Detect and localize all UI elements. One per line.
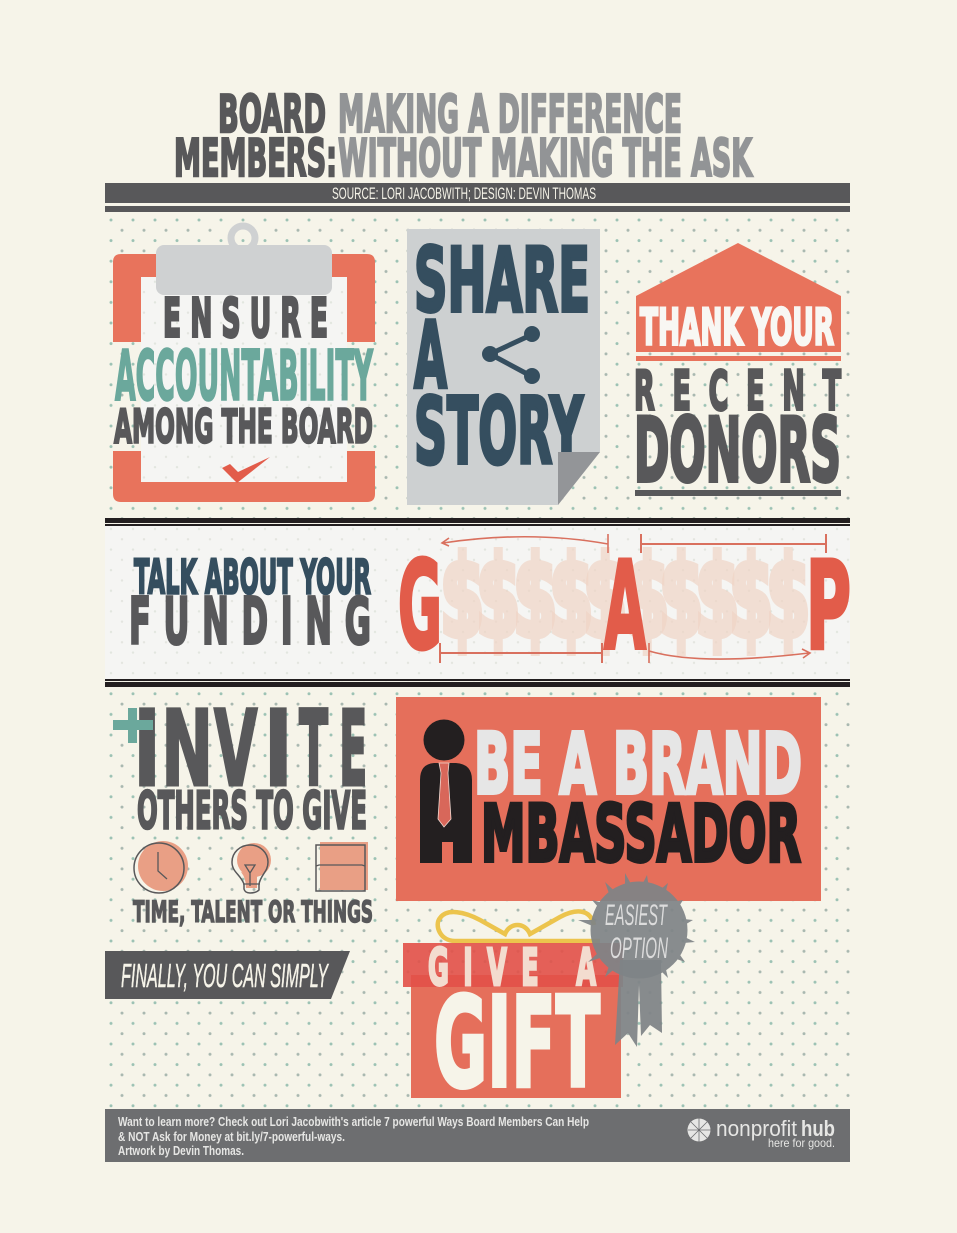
source bar [105, 183, 850, 212]
rosette ribbon [615, 960, 662, 1047]
banner: finally, you can simply: FINALLY, YOU CAN SIMPLY [121, 957, 329, 994]
heading: invite [134, 688, 367, 811]
house shape [636, 243, 841, 361]
text: recent: RECENT [634, 360, 841, 423]
icon: clock [134, 841, 188, 893]
badge text [605, 899, 668, 965]
panel: share a story [407, 229, 600, 505]
dollar signs [440, 533, 810, 663]
icon: plus [113, 708, 153, 743]
clip [156, 226, 332, 295]
logo: nonprofit hub: hub [801, 1116, 835, 1141]
rosette seal [578, 873, 695, 978]
arrows and brackets [440, 534, 826, 663]
icon: person as letter a [420, 720, 472, 863]
dollar signs: $ [695, 533, 739, 663]
text: time, talent or things: TIME, TALENT OR THINGS [133, 895, 373, 930]
text: OTHERS TO GIVE [137, 782, 367, 842]
dollar signs: $ [583, 533, 627, 663]
clipboard frame [113, 254, 375, 502]
heading: gift: GIFT [434, 971, 600, 1116]
panel: thank your recent donors [634, 243, 841, 502]
dollar signs: $ [766, 533, 810, 663]
text: among the board: AMONG THE BOARD [114, 400, 373, 454]
panel: give a gift [403, 911, 623, 1116]
panel: accountability clipboard [113, 226, 375, 502]
badge: easiest option [578, 873, 695, 1047]
footer text: Artwork by Devin Thomas. [118, 1143, 244, 1158]
icon: envelope [316, 842, 368, 891]
dollar signs: $ [625, 533, 669, 663]
dollar signs: $ [476, 533, 520, 663]
gift lid [403, 943, 623, 987]
heading: gap [398, 536, 851, 677]
dollar signs: $ [549, 533, 593, 663]
gift bow [438, 911, 600, 941]
title: MEMBERS: [174, 129, 337, 189]
panel: talk about your funding [105, 518, 851, 687]
logo: nonprofit hub [688, 1116, 835, 1150]
underline [635, 490, 841, 496]
footer [105, 1109, 850, 1162]
gift box [411, 975, 621, 1098]
icon: share [482, 326, 540, 384]
heading: ensure: ENSURE [163, 287, 328, 349]
heading: share a story [414, 229, 590, 485]
text: funding: FUNDING [129, 584, 371, 659]
dollar signs: $ [659, 533, 703, 663]
footer text: & NOT Ask for Money at bit.ly/7-powerful-ways. [118, 1129, 345, 1144]
footer text: Want to learn more? Check out Lori Jacobwith's article 7 powerful Ways Board Members Can Help [118, 1114, 589, 1129]
heading: invite: V [214, 688, 258, 810]
source bar: SOURCE: LORI JACOBWITH; DESIGN: DEVIN THOMAS [332, 184, 596, 203]
heading: share a story: SHARE [414, 229, 590, 332]
icon: light bulb [232, 843, 271, 893]
panel: be a brand ambassador [396, 697, 821, 901]
heading: invite: E [339, 688, 367, 810]
dollar signs: $ [729, 533, 773, 663]
dollar signs: $ [513, 533, 557, 663]
heading: share a story: A [414, 302, 447, 409]
logo: nonprofit hub: here for good. [768, 1136, 835, 1150]
panel: invite others [113, 688, 373, 930]
heading: invite: T [299, 688, 328, 810]
heading: share a story: STORY [414, 378, 584, 485]
footer text [118, 1114, 589, 1158]
badge text: OPTION [610, 932, 668, 965]
heading: invite: I [264, 688, 293, 810]
heading: gap: P [806, 536, 851, 677]
heading: invite: N [162, 690, 213, 811]
heading: gap: G [398, 536, 442, 677]
title [174, 85, 753, 189]
text: give a: GIVE A [428, 938, 596, 998]
heading: gap: A [604, 536, 646, 677]
dollar signs: $ [440, 533, 484, 663]
badge: easiest option: EASIEST [605, 899, 668, 932]
icon: check mark [222, 457, 270, 483]
banner: finally, you can simply [105, 951, 350, 999]
panel: talk about your funding: TALK ABOUT YOUR [134, 551, 371, 606]
text: ACCOUNTABILITY [115, 337, 373, 417]
heading: invite: I [134, 690, 161, 810]
title: BOARD [218, 85, 326, 145]
logo: nonprofit hub: nonprofit [716, 1116, 797, 1141]
paper [407, 229, 600, 505]
paper fold [558, 452, 600, 505]
